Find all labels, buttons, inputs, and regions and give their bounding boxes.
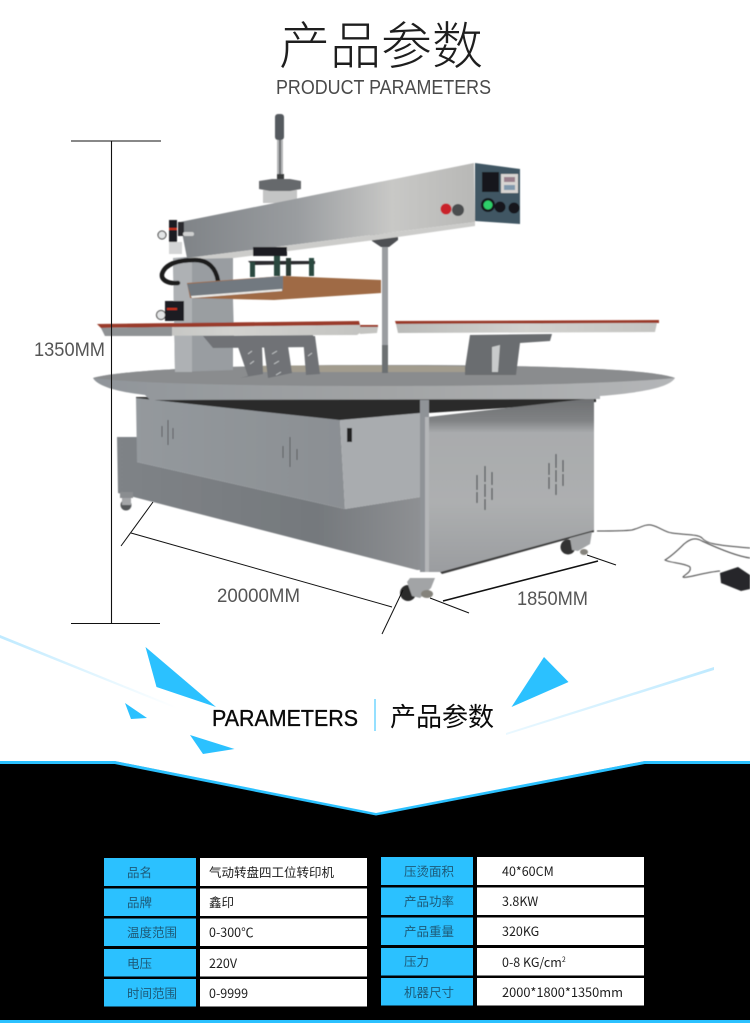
- machine photo illustration: [93, 114, 750, 601]
- dimension: depth: [430, 555, 616, 613]
- row: 产品功率: 3.8KW: [502, 891, 538, 910]
- heading: english subtitle: PRODUCT PARAMETERS: [276, 77, 491, 99]
- emergency stop button: [440, 204, 464, 216]
- label: 1850MM: 1850MM: [517, 589, 588, 610]
- dimension lines: [71, 141, 616, 634]
- row: 机器尺寸: 机器尺寸: [404, 982, 454, 1001]
- beam: [180, 163, 520, 259]
- title: [276, 5, 491, 99]
- triangle: small left: [125, 703, 147, 719]
- triangle: lower left: [190, 735, 234, 754]
- triangle: large left: [146, 647, 216, 707]
- spec table: right: [381, 857, 644, 1006]
- heat press plate: [187, 276, 381, 300]
- row: 压力: 0-8 KG/cm: [502, 952, 562, 971]
- spec table: left: [104, 858, 367, 1006]
- triangle: right: [512, 657, 568, 707]
- row: 压力: 压力: [404, 951, 429, 970]
- row: 产品重量: [381, 918, 644, 945]
- row: 产品功率: 产品功率: [404, 891, 454, 910]
- left platen: [97, 321, 378, 336]
- row: 时间范围: 时间范围: [127, 983, 177, 1002]
- row: 压力: [381, 948, 644, 976]
- heat press springs and mount: [248, 247, 315, 277]
- row: 电压: 电压: [127, 953, 152, 972]
- dark gap under table: [136, 397, 596, 421]
- right cabinet panel: [428, 398, 594, 574]
- corner post: [420, 400, 429, 572]
- row: 时间范围: 0-9999: [209, 983, 248, 1002]
- row: 温度范围: 0-300℃: [209, 922, 254, 941]
- row: 产品重量: 320KG: [502, 921, 539, 940]
- row: 品牌: 品牌: [127, 892, 152, 911]
- banner chinese heading: 产品参数: [390, 697, 494, 734]
- row: 电压: 220V: [209, 953, 238, 972]
- row: 压力: 2: [562, 955, 566, 965]
- row: 机器尺寸: 2000*1800*1350mm: [502, 982, 623, 1001]
- top cylinder: [259, 114, 301, 203]
- base side panel: [117, 437, 424, 570]
- label: 1350MM: 1350MM: [34, 340, 105, 361]
- row: 品名: 品名: [127, 862, 152, 881]
- row: 时间范围: [104, 979, 367, 1006]
- row: 品名: [104, 858, 367, 886]
- row: 产品重量: 产品重量: [404, 921, 454, 940]
- row: 品名: 气动转盘四工位转印机: [209, 862, 335, 881]
- support pole: [370, 232, 398, 373]
- banner english heading: PARAMETERS: [212, 705, 358, 731]
- row: 压烫面积: [381, 857, 644, 885]
- right arm supports: [465, 334, 552, 375]
- row: 压烫面积: 40*60CM: [502, 861, 554, 880]
- round table top: [93, 365, 675, 400]
- foot pedal and cable: [597, 525, 750, 591]
- row: 温度范围: [104, 918, 367, 946]
- row: 机器尺寸: [381, 978, 644, 1006]
- air hose: [162, 260, 218, 283]
- control panel: [475, 163, 520, 224]
- right platen: [395, 320, 659, 333]
- row: 品牌: 鑫印: [209, 892, 234, 911]
- label: 20000MM: 20000MM: [217, 586, 300, 607]
- banner divider: [374, 699, 376, 731]
- row: 品牌: [104, 888, 367, 916]
- left arm supports: [203, 335, 320, 378]
- dimension: height: [71, 141, 161, 624]
- casters: [120, 492, 592, 601]
- black specification background: [0, 761, 750, 1023]
- air regulators: [156, 220, 194, 321]
- dimension: length: [121, 502, 403, 634]
- decorative section banner: [0, 635, 714, 754]
- row: 压烫面积: 压烫面积: [404, 861, 454, 880]
- heading: chinese title: 产品参数: [279, 5, 483, 79]
- row: 产品功率: [381, 888, 644, 915]
- column: [173, 254, 234, 372]
- row: 电压: [104, 949, 367, 976]
- front drawer box: [136, 398, 420, 509]
- row: 温度范围: 温度范围: [127, 922, 177, 941]
